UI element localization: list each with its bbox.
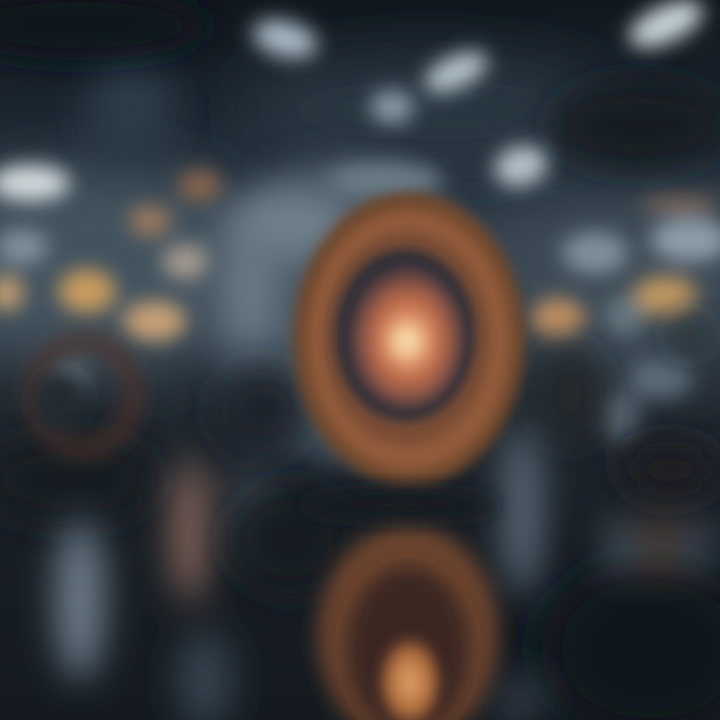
shadow below rotor [300, 491, 500, 519]
left warm lights [0, 170, 222, 391]
left ring wheel [34, 341, 134, 449]
reflected rotor [318, 525, 498, 720]
rotor: inner groove [350, 267, 464, 409]
rotor: glowing core [358, 278, 458, 402]
rotor: outer copper ring [293, 192, 525, 486]
rotor: dark groove [335, 249, 475, 421]
ceiling lights [0, 0, 710, 201]
rotor: hot centre [392, 328, 420, 356]
rotor: inner band [323, 230, 491, 446]
right lights [531, 198, 720, 441]
rotor: ring banding [308, 210, 510, 470]
machine body behind rotor [210, 160, 470, 595]
dark machinery right [536, 319, 720, 500]
floor reflections [56, 425, 712, 720]
main rotor rings [293, 192, 525, 486]
